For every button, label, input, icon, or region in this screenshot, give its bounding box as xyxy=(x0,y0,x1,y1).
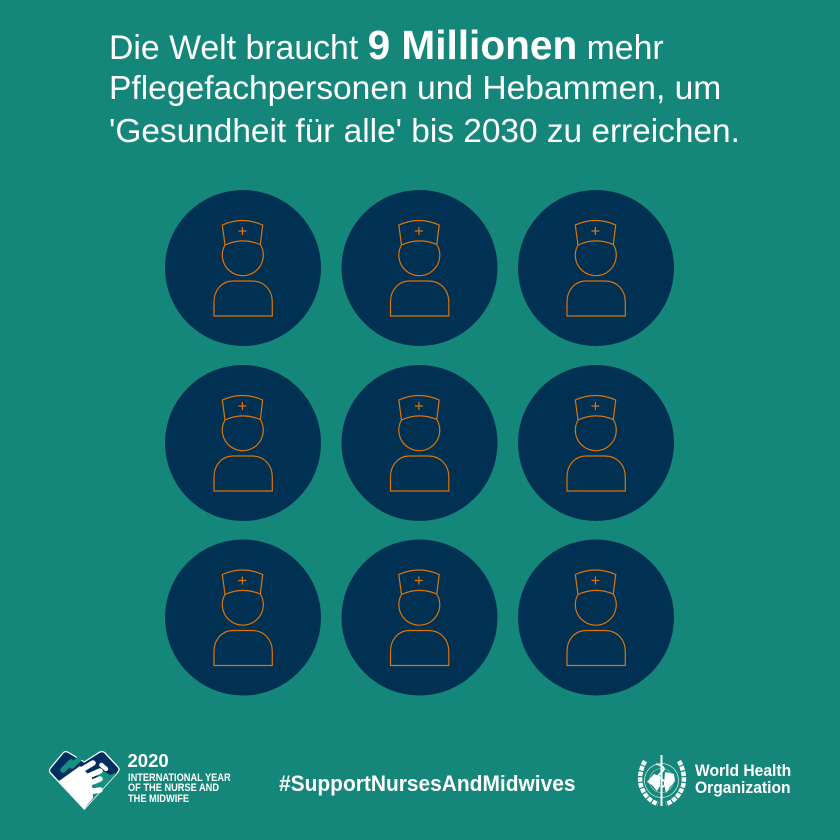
nurse icon row 1 column 3 xyxy=(518,190,674,346)
nurse icon row 2 column 2 xyxy=(342,365,498,521)
logo text: 2020 International Year xyxy=(128,750,230,805)
title: 'Gesundheit für alle' bis 2030 zu erreichen. xyxy=(109,113,740,150)
title xyxy=(109,22,740,150)
WHO wordmark xyxy=(694,761,791,797)
WHO wordmark: World Health xyxy=(694,761,791,780)
nurse icon row 2 column 3 xyxy=(518,365,674,521)
logo text: 2020 International Year: THE MIDWIFE xyxy=(128,793,189,805)
nurse icon row 3 column 1 xyxy=(165,540,321,696)
nurse icon row 3 column 2 xyxy=(342,540,498,696)
icon: heart and hands logo xyxy=(48,751,120,810)
nurse icon row 1 column 1 xyxy=(165,190,321,346)
icon: WHO emblem xyxy=(638,755,686,806)
nurse icon row 3 column 3 xyxy=(518,540,674,696)
nurse icon row 1 column 2 xyxy=(342,190,498,346)
title: Pflegefachpersonen und Hebammen, um xyxy=(109,70,721,107)
WHO wordmark: Organization xyxy=(694,778,790,797)
logo text: 2020 International Year: OF THE NURSE AND xyxy=(128,782,219,794)
nurse icon row 2 column 1 xyxy=(165,365,321,521)
logo text: 2020 International Year: 2020 xyxy=(128,750,169,771)
hashtag: #SupportNursesAndMidwives xyxy=(279,771,575,796)
logo text: 2020 International Year: INTERNATIONAL YEAR xyxy=(128,772,230,784)
title: Die Welt braucht 9 Millionen mehr xyxy=(109,22,664,68)
